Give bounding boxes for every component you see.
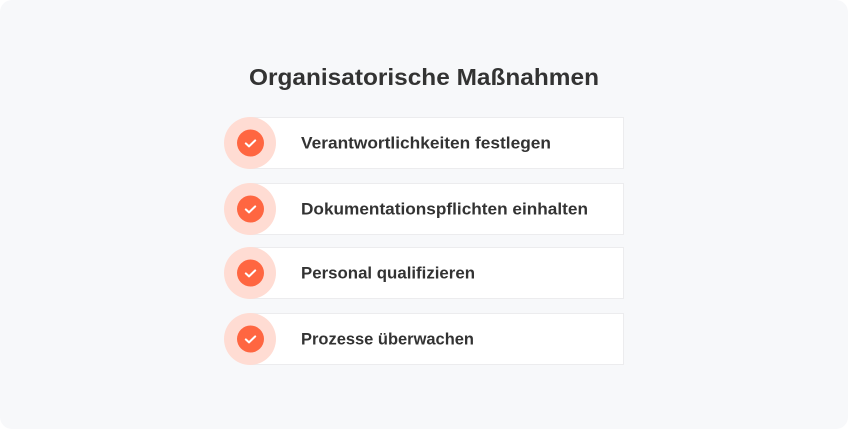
list item: Verantwortlichkeiten festlegen xyxy=(224,117,624,169)
list item: Prozesse überwachen xyxy=(224,313,624,365)
list item: Prozesse überwachen: Prozesse überwachen xyxy=(301,330,474,348)
list item: Personal qualifizieren: Personal qualifizieren xyxy=(301,264,475,282)
title: Organisatorische Maßnahmen xyxy=(249,64,599,90)
list item: Dokumentationspflichten einhalten: Dokumentationspflichten einhalten xyxy=(301,200,588,218)
list item: Verantwortlichkeiten festlegen: Verantwortlichkeiten festlegen xyxy=(301,134,551,152)
list item: Personal qualifizieren xyxy=(224,247,624,299)
list item: Dokumentationspflichten einhalten xyxy=(224,183,624,235)
